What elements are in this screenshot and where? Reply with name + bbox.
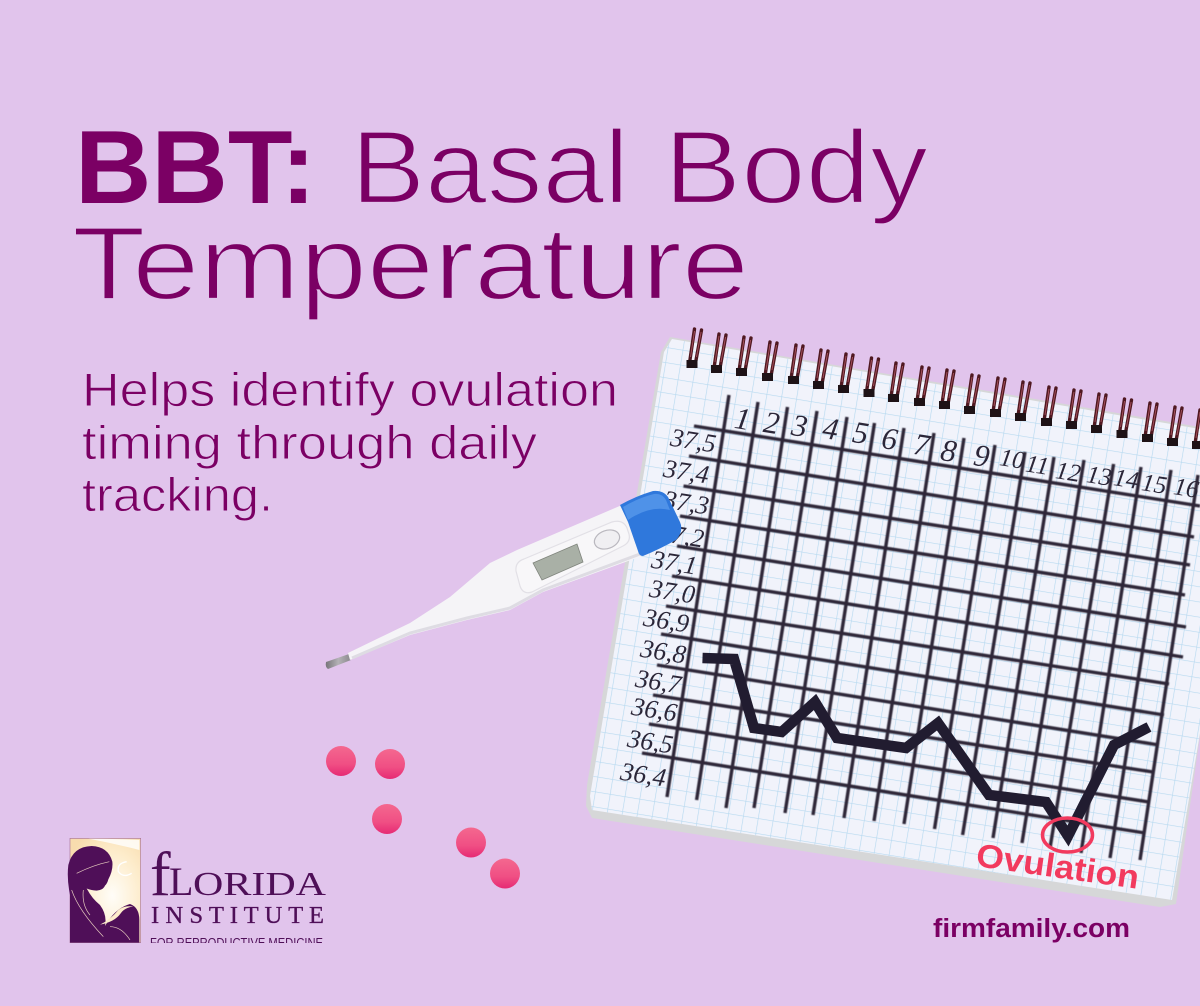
notebook chart <box>586 329 1200 907</box>
ovulation label: Ovulation <box>974 836 1142 896</box>
day labels: 13 <box>1085 461 1114 492</box>
logo emblem <box>68 838 141 943</box>
temperature scale labels: 36,4 <box>618 757 668 792</box>
temperature scale labels: 37,2 <box>656 518 706 553</box>
notebook paper <box>590 339 1200 900</box>
day labels: 11 <box>1024 450 1051 481</box>
temperature scale labels: 37,3 <box>661 485 711 520</box>
thermometer body <box>348 505 642 660</box>
subtitle text block: tracking. <box>82 468 273 521</box>
subtitle text block <box>82 363 618 521</box>
logo wordmark: ORIDA <box>193 866 327 903</box>
logo wordmark <box>150 851 326 943</box>
day labels <box>732 400 1200 504</box>
notebook page stack <box>586 337 1200 907</box>
title: Basal <box>351 110 629 226</box>
title <box>72 110 928 322</box>
logo wordmark: I N S T I T U T E <box>151 903 324 929</box>
day labels: 14 <box>1112 464 1141 495</box>
day labels: 6 <box>879 420 901 457</box>
temperature scale labels <box>618 423 718 792</box>
thermometer body shading <box>352 554 640 658</box>
chart grid <box>642 395 1200 860</box>
day labels: 16 <box>1172 473 1200 504</box>
subtitle text block: Helps identify ovulation <box>82 363 618 416</box>
temperature scale labels: 37,0 <box>647 574 697 609</box>
day labels: 15 <box>1140 469 1169 500</box>
subtitle text block: timing through daily <box>82 416 538 469</box>
day labels: 10 <box>998 444 1027 475</box>
temperature scale labels: 37,4 <box>661 454 711 489</box>
day labels: 3 <box>788 407 810 444</box>
temperature scale labels: 37,5 <box>668 423 718 458</box>
temperature scale labels: 36,6 <box>629 692 679 727</box>
day labels: 7 <box>911 426 934 463</box>
temperature line <box>702 658 1149 836</box>
day labels: 2 <box>761 404 782 441</box>
logo <box>68 838 327 950</box>
ovulation circle <box>1042 818 1092 852</box>
day labels: 1 <box>732 400 753 437</box>
day labels: 9 <box>971 437 992 474</box>
thermometer button <box>592 527 622 552</box>
temperature scale labels: 37,1 <box>649 545 699 580</box>
temperature scale labels: 36,8 <box>638 634 688 669</box>
day labels: 12 <box>1054 457 1083 488</box>
day labels: 8 <box>938 432 960 469</box>
thermometer <box>326 491 681 669</box>
day labels: 4 <box>820 410 841 447</box>
logo wordmark: FOR REPRODUCTIVE MEDICINE <box>150 935 323 950</box>
logo wordmark: f <box>150 841 171 909</box>
website url: firmfamily.com <box>933 915 1130 943</box>
spiral binding <box>686 329 1200 449</box>
day labels: 5 <box>850 414 871 451</box>
temperature scale labels: 36,9 <box>641 603 691 638</box>
thermometer display bezel <box>516 521 629 593</box>
temperature scale labels: 36,7 <box>633 664 684 700</box>
title: BBT: <box>75 110 316 226</box>
title: Temperature <box>72 206 749 322</box>
cap highlight <box>623 494 670 520</box>
thermometer screen <box>533 544 583 580</box>
thermometer blue cap <box>620 491 681 556</box>
pills <box>326 746 520 888</box>
logo wordmark: L <box>169 859 193 904</box>
title: Body <box>664 110 928 226</box>
thermometer metal tip <box>326 654 351 669</box>
temperature scale labels: 36,5 <box>625 724 675 759</box>
